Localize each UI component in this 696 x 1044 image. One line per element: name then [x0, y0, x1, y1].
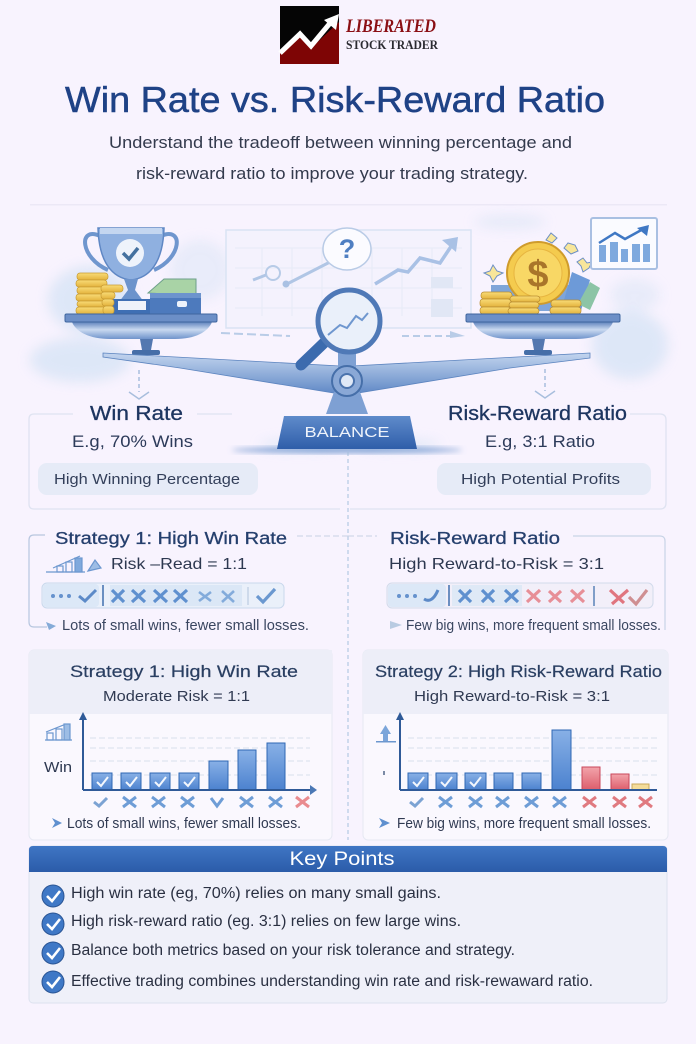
- risk-reward heading: Risk-Reward Ratio: [448, 403, 627, 425]
- trophy on left pan: [85, 228, 177, 314]
- reward line: High Reward-to-Risk = 3:1: [389, 556, 604, 573]
- right pan: [466, 314, 620, 355]
- point 4: Effective trading combines understanding win rate and risk-rewaward ratio.: [71, 973, 593, 990]
- risk-reward pill: [437, 463, 651, 495]
- panel: strategy 1 chart: [29, 650, 332, 840]
- background chart: [221, 230, 471, 338]
- logo: STOCK TRADER: [346, 37, 439, 52]
- balance plate: [232, 416, 462, 453]
- coins and wallet on left pan: [76, 273, 201, 314]
- axis label: Win: [44, 759, 72, 776]
- arrow down right: [535, 369, 555, 398]
- panel header: [29, 650, 332, 714]
- outcome row: [42, 583, 284, 608]
- strategy heading: Strategy 1: High Win Rate: [55, 528, 287, 548]
- logo: LIBERATED: [345, 16, 436, 37]
- point 2: [42, 913, 461, 935]
- caption: [390, 621, 402, 629]
- win rate pill text: High Winning Percentage: [54, 471, 240, 488]
- caption: [379, 818, 390, 828]
- panel title: Strategy 2: High Risk-Reward Ratio: [375, 662, 662, 681]
- risk-reward example: E.g, 3:1 Ratio: [485, 432, 595, 451]
- question bubble: ?: [339, 234, 355, 264]
- axis icon: [376, 725, 396, 775]
- panel header: [363, 650, 668, 714]
- coins on right pan: $: [527, 254, 549, 296]
- balance plate: BALANCE: [304, 424, 390, 441]
- point 3: Balance both metrics based on your risk tolerance and strategy.: [71, 942, 515, 959]
- mini bar icon: [46, 556, 101, 572]
- caption: [46, 622, 56, 630]
- arrow down left: [129, 370, 149, 399]
- caption: [52, 818, 62, 828]
- subtitle: risk-reward ratio to improve your trading strategy.: [136, 164, 528, 183]
- strategy summary left: Lots of small wins, fewer small losses.: [62, 617, 309, 634]
- win rate pill: [38, 463, 258, 495]
- balance beam: [103, 348, 590, 414]
- point 1: [42, 885, 441, 907]
- win rate heading: Win Rate: [90, 403, 183, 425]
- point 2: High risk-reward ratio (eg. 3:1) relies on few large wins.: [71, 913, 461, 930]
- strategy summary right: Few big wins, more frequent small losses.: [406, 617, 661, 634]
- pivot: [332, 366, 362, 396]
- risk line: Risk –Read = 1:1: [111, 556, 247, 573]
- strategy summary left: [29, 528, 348, 634]
- coins on right pan: [480, 233, 600, 314]
- outcome marks: [94, 797, 309, 807]
- panel subtitle: High Reward-to-Risk = 3:1: [414, 688, 610, 705]
- panel: strategy 2 chart: Few big wins, more frequent small losses.: [397, 816, 651, 832]
- strategy summary right: [348, 528, 665, 634]
- panel: risk-reward: [350, 403, 666, 509]
- panel: win rate: [29, 403, 340, 509]
- axis icon: [45, 724, 72, 740]
- key points heading: Key Points: [290, 849, 394, 870]
- bar chart: [79, 712, 317, 795]
- hero background wash: [30, 215, 668, 450]
- question bubble: [323, 228, 371, 270]
- panel subtitle: Moderate Risk = 1:1: [103, 688, 250, 705]
- title: Win Rate vs. Risk-Reward Ratio: [65, 79, 605, 120]
- dashed centre line: [347, 452, 349, 840]
- win rate example: E.g, 70% Wins: [72, 432, 193, 451]
- outcome marks: [410, 797, 652, 807]
- panel: strategy 2 chart: [363, 650, 668, 840]
- panel: strategy 1 chart: Lots of small wins, fewer small losses.: [67, 816, 301, 832]
- subtitle: Understand the tradeoff between winning percentage and: [109, 133, 572, 152]
- panel: key points: [29, 846, 667, 1003]
- left pan: [65, 314, 217, 355]
- key points header: [29, 846, 667, 872]
- magnifying glass: [301, 290, 380, 365]
- subtitle: [109, 133, 572, 183]
- outcome row: [387, 583, 653, 608]
- logo: [280, 6, 439, 64]
- strategy heading: Risk-Reward Ratio: [390, 528, 560, 548]
- chart card icon: [591, 218, 657, 269]
- panel title: Strategy 1: High Win Rate: [70, 662, 298, 681]
- risk-reward pill text: High Potential Profits: [461, 471, 620, 488]
- point 1: High win rate (eg, 70%) relies on many small gains.: [71, 885, 441, 902]
- bar chart: [396, 712, 658, 790]
